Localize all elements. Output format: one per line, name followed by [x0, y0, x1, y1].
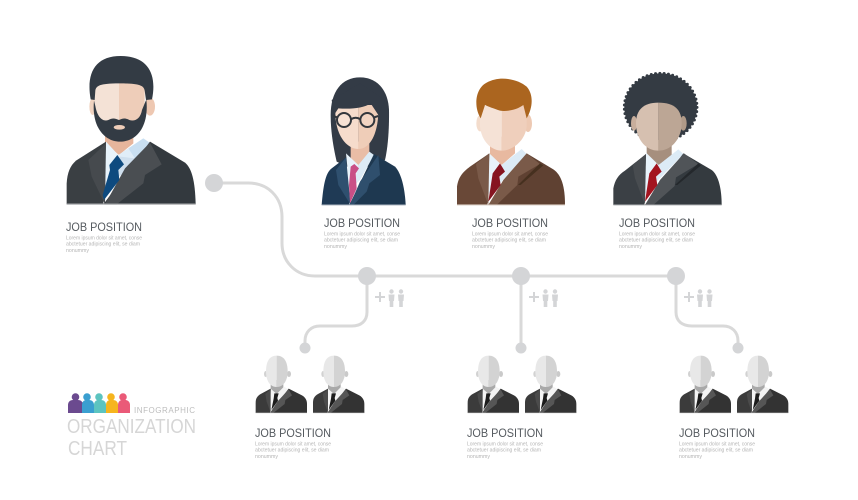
node: branch three	[667, 267, 685, 285]
title: organization chart: ORGANIZATION	[67, 415, 196, 438]
text: team one description: Lorem ipsum dolor sit amet, conse	[255, 442, 331, 448]
heading: job position, executive: JOB POSITION	[66, 220, 142, 234]
portrait: bearded executive	[67, 56, 196, 204]
icon: row of colored people	[68, 393, 130, 413]
text: executive description: Lorem ipsum dolor sit amet, conse	[66, 236, 142, 242]
title: organization chart: CHART	[68, 437, 127, 460]
node: team three	[732, 342, 744, 354]
text: team three description	[679, 442, 755, 460]
text: team one description: nonummy	[255, 454, 279, 460]
text: man with afro description	[619, 232, 695, 250]
connector lines	[214, 183, 738, 348]
text: brown-haired man description: abctetuer adipiscing elit, se diam	[472, 238, 546, 244]
heading: job position, man with afro: JOB POSITION	[619, 216, 695, 230]
text: brown-haired man description	[472, 232, 548, 250]
heading: job position, woman: JOB POSITION	[324, 216, 400, 230]
title: organization chart	[67, 415, 196, 460]
heading: job position, team three: JOB POSITION	[679, 426, 755, 440]
text: team one description: abctetuer adipiscing elit, se diam	[255, 448, 329, 454]
heading: job position, team two: JOB POSITION	[467, 426, 543, 440]
node: team two	[516, 342, 526, 354]
node: chief executive	[205, 174, 223, 192]
node: team one	[300, 342, 310, 354]
text: executive description: nonummy	[66, 248, 90, 254]
text: team two description: nonummy	[467, 454, 491, 460]
label: infographic: INFOGRAPHIC	[134, 406, 195, 415]
portrait: brown-haired man	[457, 79, 565, 205]
text: executive description	[66, 236, 142, 254]
icon: plus two people, branch two	[529, 289, 558, 307]
team one: two gray figures	[256, 356, 364, 413]
heading: job position, brown-haired man: JOB POSITION	[472, 216, 548, 230]
icon: plus two people, branch one	[375, 289, 404, 307]
text: team two description	[467, 442, 543, 460]
text: man with afro description: abctetuer adipiscing elit, se diam	[619, 238, 693, 244]
text: woman description: abctetuer adipiscing elit, se diam	[324, 238, 398, 244]
text: brown-haired man description: Lorem ipsum dolor sit amet, conse	[472, 232, 548, 238]
node: branch two	[512, 267, 530, 285]
text: woman description	[324, 232, 400, 250]
text: man with afro description: nonummy	[619, 244, 643, 250]
icon: plus two people, branch three	[684, 289, 712, 307]
text: team two description: abctetuer adipiscing elit, se diam	[467, 448, 541, 454]
text: team three description: abctetuer adipiscing elit, se diam	[679, 448, 753, 454]
text: brown-haired man description: nonummy	[472, 244, 496, 250]
node: branch one	[358, 267, 376, 285]
team two: two gray figures	[468, 356, 576, 413]
text: team three description: Lorem ipsum dolor sit amet, conse	[679, 442, 755, 448]
text: team two description: Lorem ipsum dolor sit amet, conse	[467, 442, 543, 448]
portrait: man with afro	[613, 73, 722, 205]
heading: job position, team one: JOB POSITION	[255, 426, 331, 440]
portrait: woman with glasses	[322, 77, 406, 205]
text: man with afro description: Lorem ipsum dolor sit amet, conse	[619, 232, 695, 238]
text: woman description: nonummy	[324, 244, 348, 250]
text: woman description: Lorem ipsum dolor sit amet, conse	[324, 232, 400, 238]
text: team one description	[255, 442, 331, 460]
team three: two gray figures	[680, 356, 788, 413]
text: team three description: nonummy	[679, 454, 703, 460]
text: executive description: abctetuer adipiscing elit, se diam	[66, 242, 140, 248]
